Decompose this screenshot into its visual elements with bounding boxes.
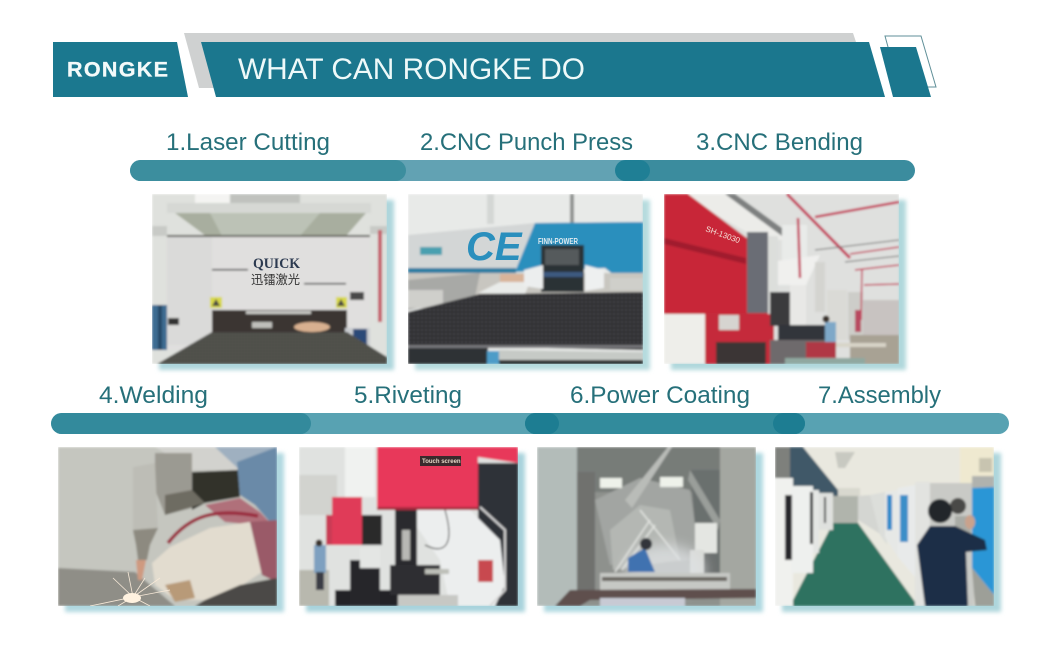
progress bar row 2 xyxy=(51,413,1009,434)
photo 3: CNC bending xyxy=(664,194,906,370)
grey backing strip xyxy=(184,33,856,88)
brand tab: RONGKE xyxy=(53,42,188,97)
label: welding: 4.Welding xyxy=(99,382,208,409)
sparks xyxy=(90,572,170,606)
label: CNC punch press: 2.CNC Punch Press xyxy=(420,129,633,156)
photo 2: CNC punch press xyxy=(408,194,650,370)
machine logo: QUICK xyxy=(253,256,300,272)
brand tab: RONGKE: RONGKE xyxy=(67,58,168,82)
step labels row 1 xyxy=(166,129,863,156)
label: powder coating: 6.Power Coating xyxy=(570,382,750,409)
photo 4: welding xyxy=(58,447,284,612)
machine plate text xyxy=(420,456,461,466)
corner decoration xyxy=(880,36,936,97)
photo 7: assembly line xyxy=(775,447,1001,612)
label: laser cutting: 1.Laser Cutting xyxy=(166,129,330,156)
photo 5: riveting xyxy=(299,447,525,612)
Finn-Power lettering: FINN-POWER xyxy=(538,237,578,246)
title bar: WHAT CAN RONGKE DO xyxy=(238,53,585,86)
step labels row 2 xyxy=(99,382,941,409)
machine plate text: Touch screen xyxy=(422,459,461,465)
title bar xyxy=(201,42,885,97)
machine logo: 迅镭激光 xyxy=(251,272,300,287)
label: assembly: 7.Assembly xyxy=(818,382,941,409)
header banner xyxy=(53,33,936,97)
machine logo xyxy=(252,258,300,286)
machine model lettering: SH-13030 xyxy=(704,224,742,245)
photo 6: powder coating booth xyxy=(537,447,763,612)
CE brand lettering: CE xyxy=(466,225,523,269)
progress bar row 1 xyxy=(130,160,915,181)
label: riveting: 5.Riveting xyxy=(354,382,462,409)
label: CNC bending: 3.CNC Bending xyxy=(696,129,863,156)
photo 1: laser cutting machine xyxy=(152,194,394,370)
